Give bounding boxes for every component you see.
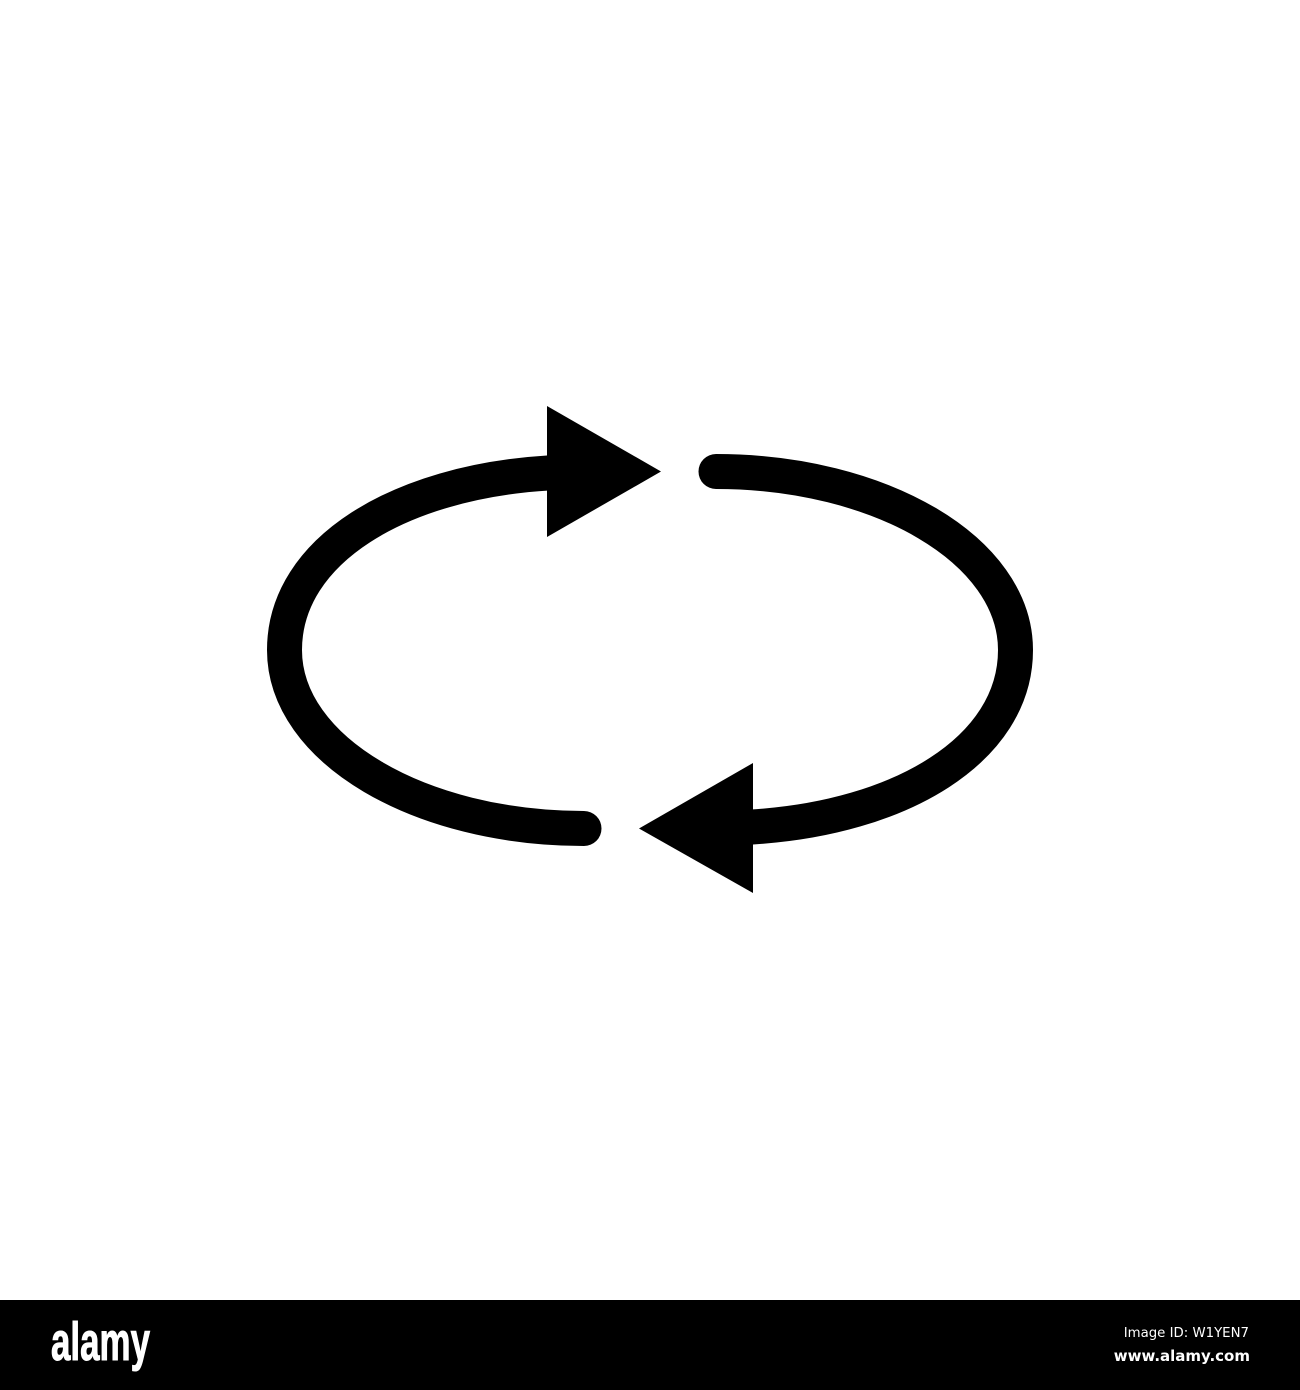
icon: two circular arrows xyxy=(284,406,1016,893)
logo: alamy: alamy xyxy=(51,1312,150,1372)
arrow: top-left arc pointing right xyxy=(284,406,661,828)
arrow: bottom-right arc pointing left xyxy=(639,472,1016,893)
website: www.alamy.com xyxy=(1114,1347,1250,1365)
image id: Image ID: W1YEN7 xyxy=(1124,1326,1249,1341)
footer bar xyxy=(0,1300,1300,1390)
